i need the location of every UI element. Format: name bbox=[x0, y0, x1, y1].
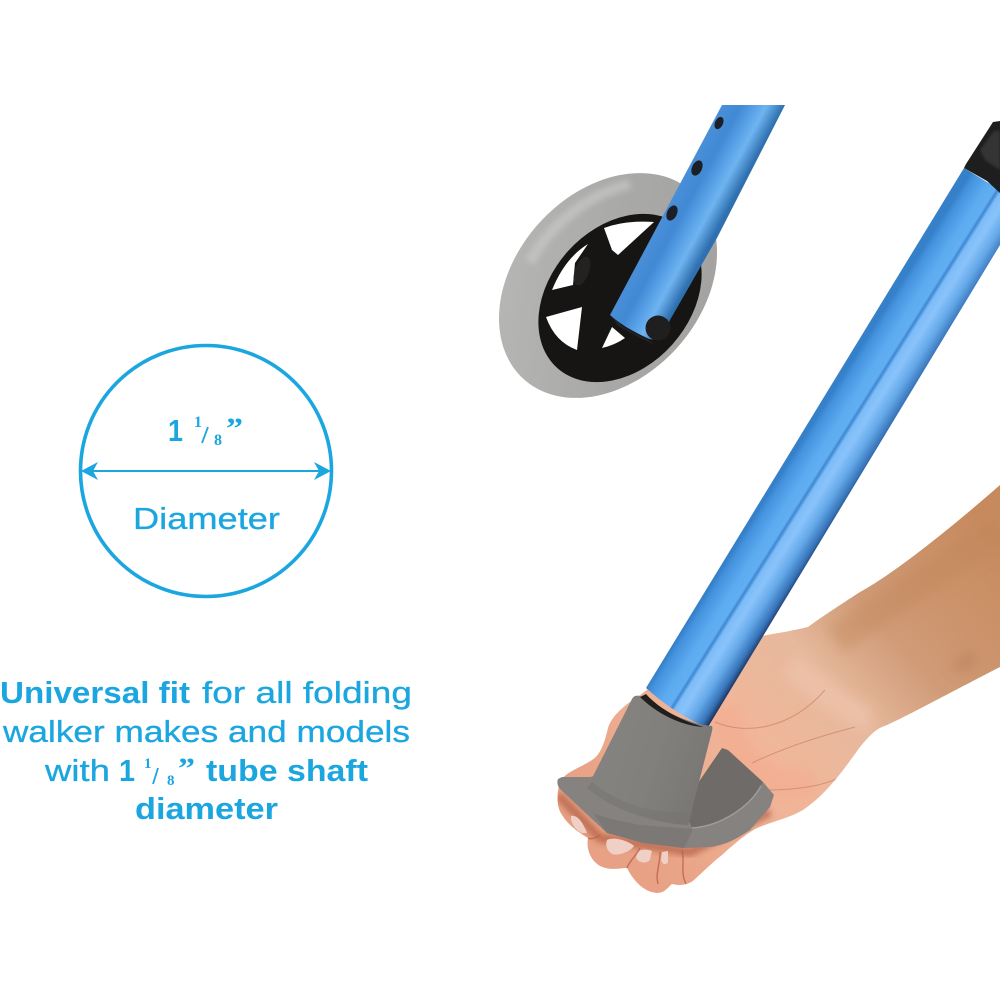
tip stem cone bbox=[587, 696, 712, 825]
caption text: 1 bbox=[144, 756, 152, 772]
caption text: tube shaft bbox=[206, 753, 368, 788]
lip front facet bbox=[594, 814, 693, 848]
caption text: ” bbox=[178, 752, 195, 785]
palm creases bbox=[715, 690, 855, 790]
photo: grey rubber walker tip bbox=[557, 694, 774, 848]
diameter label: Diameter bbox=[133, 501, 280, 536]
caption text: 1 bbox=[119, 753, 135, 788]
measurement label bbox=[168, 412, 243, 449]
measurement label: 8 bbox=[214, 432, 222, 449]
caption text: 8 bbox=[167, 773, 174, 789]
photo: lower tube of wheel leg bbox=[610, 105, 785, 345]
photo: main walker tube bbox=[646, 121, 1000, 727]
adjustment holes bbox=[664, 115, 725, 222]
axle bolt bbox=[646, 316, 670, 340]
photo: hand and forearm bbox=[558, 485, 1000, 893]
finger nails bbox=[571, 816, 668, 864]
wheel spoke windows bbox=[546, 222, 654, 350]
measurement label: ” bbox=[226, 412, 243, 445]
caption text: with bbox=[44, 753, 110, 788]
measurement label: 1 bbox=[194, 414, 202, 431]
handle cap bbox=[964, 121, 1000, 193]
tip cup lip bbox=[557, 770, 774, 848]
caption text: Universal fit bbox=[0, 675, 190, 710]
caption text: for all folding bbox=[202, 675, 412, 710]
caption text bbox=[0, 675, 412, 826]
hand shading bbox=[558, 530, 1000, 884]
tip opening bbox=[640, 694, 704, 727]
icon: diameter circle bbox=[80, 346, 332, 596]
tip cup inner surface bbox=[660, 748, 763, 832]
measurement label: 1 bbox=[168, 413, 183, 448]
photo: front wheel bbox=[455, 130, 761, 441]
dimension arrow bbox=[81, 462, 331, 480]
finger gaps bbox=[588, 835, 686, 884]
caption text: diameter bbox=[135, 791, 278, 826]
caption text: walker makes and models bbox=[2, 714, 410, 749]
